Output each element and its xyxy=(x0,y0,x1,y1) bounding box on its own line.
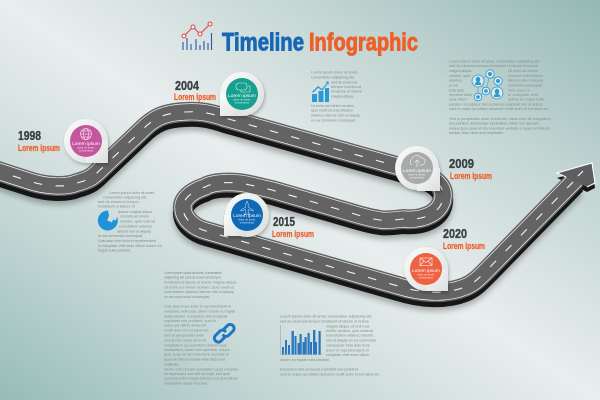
text block: lower middle: mollit anim id est laborum. xyxy=(164,328,209,332)
text block: lower middle: quasi architecto beatae vitae dicta sunt xyxy=(164,356,226,362)
text block: under 1998: sed do eiusmod tempor xyxy=(98,199,140,204)
text block: top right: sed do eiusmod tempor incididunt ut labore et dolore xyxy=(449,63,539,68)
text block: under 1998: Ut enim ad minim xyxy=(120,214,150,218)
text block: lower middle: ipsa quae ab illo inventore veritatis et xyxy=(164,352,230,356)
text block: lower middle: voluptatem sequi nesciunt. xyxy=(164,380,208,386)
pin: 2004: dolor sit amet, xyxy=(233,98,251,102)
label: 2015: Lorem ipsum xyxy=(272,229,314,239)
text block: top right: sunt in culpa qui officia deserunt mollit anim id est laborum. xyxy=(449,106,549,111)
label: 2004: Lorem ipsum xyxy=(174,92,216,102)
text block: lower middle: culpa qui officia deserunt xyxy=(164,322,207,328)
text block: top right: Duis aute xyxy=(449,88,465,92)
arrow head xyxy=(557,163,595,187)
text block: top right: reprehenderit xyxy=(449,92,473,97)
text block: near 2004: ullamco laboris nisi ut aliquip xyxy=(311,112,361,118)
pin: 2009: consectetur xyxy=(410,176,424,180)
text block: under 1998: consectetur adipiscing elit, xyxy=(103,194,147,200)
pin: 2015 xyxy=(224,193,269,237)
text block: lower middle: cupidatat non proident, sunt in xyxy=(164,318,216,323)
label: 2020: Lorem ipsum xyxy=(443,241,485,251)
title: Infographic xyxy=(309,28,418,56)
text block: near 2004: ex ea commodo consequat. xyxy=(311,118,356,122)
label: 1998: Lorem ipsum xyxy=(18,143,60,153)
text block: lower middle: Nemo enim ipsam voluptatem quia voluptas xyxy=(164,366,238,372)
text block: top right: Ut enim ad minim xyxy=(508,68,539,73)
pin: 2015: Lorem ipsum xyxy=(233,213,261,219)
text block: under 1998: veniam, quis nostrud xyxy=(120,218,155,224)
text block: top right: magna aliqua. xyxy=(449,68,472,73)
pin: 2020: dolor sit amet, xyxy=(417,272,435,276)
label: 2015: 2015 xyxy=(273,215,295,229)
icon: envelope xyxy=(420,258,432,266)
pin: 2020 xyxy=(404,247,448,291)
label: 2004 xyxy=(174,79,216,102)
text block: bottom center: magna aliqua. Ut enim ad xyxy=(326,324,369,328)
text block: lower middle: incididunt ut labore et dolore magna aliqua. xyxy=(164,280,237,284)
text block: top right: veniam, quis xyxy=(449,73,470,78)
text block: top right: beatae vitae dicta sunt explicabo. xyxy=(449,130,504,135)
text block: bottom center: dolor in reprehenderit in xyxy=(326,348,369,352)
pin: 2015: consectetur xyxy=(240,220,254,224)
text block: near 2004: Ut enim ad minim veniam, xyxy=(311,103,355,108)
label: 2009 xyxy=(449,157,492,181)
text block: bottom center: consequat. Duis aute irure xyxy=(326,342,371,348)
text block: under 1998: Duis aute irure dolor in reprehenderit xyxy=(98,238,157,243)
text block: under 1998: incididunt ut labore et xyxy=(98,204,136,208)
pin: 2004 xyxy=(220,72,264,116)
text block: lower middle: laudantium, totam rem aperiam, eaque xyxy=(164,347,231,352)
text block: bottom center: sunt in culpa qui officia deserunt mollit anim id est laborum. xyxy=(280,372,380,376)
text block: top right: laboris nisi ut aliquip xyxy=(508,78,544,82)
pin: 2009: dolor sit amet, xyxy=(408,172,426,176)
text block: lower middle: nulla pariatur. Excepteur sint occaecat xyxy=(164,314,228,318)
text block: under 1998: laboris nisi ut aliquip xyxy=(117,228,152,234)
bar chart xyxy=(280,325,322,354)
text block: under 1998: ex ea commodo consequat. xyxy=(98,233,143,238)
text block: bottom center: sed do eiusmod tempor incididunt ut labore et dolore xyxy=(280,318,370,324)
pin: 2009: Lorem ipsum xyxy=(403,168,431,174)
label: 2020 xyxy=(443,227,485,251)
text block: top right xyxy=(449,58,552,135)
text block: under 1998: dolore magna aliqua. xyxy=(118,209,153,214)
text block: lower middle: Duis aute irure dolor in reprehenderit in xyxy=(164,304,231,308)
text block: lower middle: explicabo. xyxy=(164,362,180,366)
text block: top right: nostrud exercitation xyxy=(508,73,543,78)
pin: 2004: consectetur xyxy=(235,100,249,104)
text block: top right: ex ea xyxy=(449,82,459,88)
label: 2020: 2020 xyxy=(443,227,467,241)
text block: under 1998: fugiat nulla pariatur. xyxy=(98,248,131,252)
text block: bottom center: dolore eu fugiat nulla pariatur. xyxy=(280,357,330,362)
label: 2009: Lorem ipsum xyxy=(450,171,492,181)
label: 1998 xyxy=(18,129,60,153)
icon: rising chart xyxy=(312,81,329,102)
icon: pie chart xyxy=(98,210,118,230)
text block: bottom center: Lorem ipsum dolor sit amet, consectetur adipiscing elit, xyxy=(280,314,372,318)
text block: near 2004: tempor incididunt xyxy=(331,84,362,89)
text block: top right: commodo consequat. xyxy=(508,82,543,88)
text block: top right: dolore eu fugiat nulla xyxy=(508,96,545,102)
text block: lower middle: Lorem ipsum dolor sit amet, consectetur xyxy=(164,270,223,275)
text block: top right: eaque ipsa quae ab illo inventore veritatis et quasi architecto xyxy=(449,126,551,130)
pin: 2020: consectetur xyxy=(419,276,433,280)
icon: plane xyxy=(241,201,253,215)
text block: top right: pariatur. Excepteur sint occaecat cupidatat non proident, xyxy=(449,102,543,106)
road with arrow xyxy=(0,112,595,301)
text block: near 2004: sed do eiusmod xyxy=(331,80,357,84)
text block: bottom center: exercitation ullamco laboris xyxy=(326,332,373,338)
icon: chain link xyxy=(214,324,234,342)
pin: 2020: Lorem ipsum xyxy=(412,268,440,274)
text block: lower middle: adipiscing elit, sed do eiusmod tempor xyxy=(164,274,222,280)
text block: lower middle: ex ea commodo consequat. xyxy=(164,294,210,299)
text block: near 2004: Lorem ipsum dolor sit amet, xyxy=(311,70,358,74)
text block: lower middle: exercitation ullamco laboris nisi ut aliquip xyxy=(164,289,235,294)
text block: lower middle xyxy=(164,270,239,386)
icon: chat xyxy=(236,83,250,92)
text block: bottom center: Excepteur sint occaecat cupidatat non proident, xyxy=(280,366,359,372)
text block: under 1998: exercitation ullamco xyxy=(119,224,153,228)
text block: lower middle: Ut enim ad minim veniam, quis nostrud xyxy=(164,284,234,290)
text block: lower middle: consequuntur magni dolores eos qui ratione xyxy=(164,376,239,380)
pin: 1998: dolor sit amet, xyxy=(77,146,95,150)
text block: top right: irure dolor in xyxy=(508,88,530,92)
label: 2015 xyxy=(272,215,314,239)
label: 2004: 2004 xyxy=(175,79,199,93)
text block: near 2004: consectetur adipiscing elit, xyxy=(311,74,355,80)
text block: near 2004: ut labore et dolore xyxy=(331,88,363,94)
text block: top right: Sed ut perspiciatis unde omnis iste natus error sit voluptatem xyxy=(449,116,552,121)
text block: top right: esse cillum xyxy=(449,96,468,102)
pin: 1998 xyxy=(64,119,108,163)
text block: lower middle: omnis iste natus error sit xyxy=(164,338,207,342)
icon: cloud upload xyxy=(410,156,425,167)
text block: bottom center: nisi ut aliquip ex ea commodo xyxy=(326,338,377,342)
text block: under 1998 xyxy=(98,190,162,252)
text block: top right: in voluptate velit xyxy=(508,92,539,97)
pin: 2015: dolor sit amet, xyxy=(238,218,256,222)
text block: under 1998: in voluptate velit esse cillum dolore eu xyxy=(98,243,162,248)
pin: 1998: consectetur xyxy=(79,148,93,152)
icon: people network xyxy=(472,70,503,101)
text block: lower middle: sit aspernatur aut odit aut fugit, sed quia xyxy=(164,371,231,376)
text block: lower middle: voluptate velit esse cillum dolore eu fugiat xyxy=(164,308,236,314)
text block: near 2004: magna aliqua. xyxy=(331,94,354,98)
text block: bottom center xyxy=(280,314,380,376)
pin: 2004: Lorem ipsum xyxy=(228,93,256,99)
text block: bottom center: voluptate velit esse cillum xyxy=(326,352,370,357)
title xyxy=(222,28,418,56)
text block: lower middle: voluptatem accusantium doloremque xyxy=(164,342,228,348)
text block: bottom center: minim veniam, quis nostrud xyxy=(326,328,373,333)
title: Timeline xyxy=(222,28,304,56)
text block: near 2004 xyxy=(311,70,363,122)
text block: top right: accusantium doloremque laudantium, totam rem aperiam, xyxy=(449,120,540,126)
text block: top right: Lorem ipsum dolor sit amet, consectetur adipiscing elit, xyxy=(449,58,540,64)
text block: under 1998: Lorem ipsum dolor sit amet, xyxy=(109,190,155,195)
label: 2009: 2009 xyxy=(449,157,474,171)
pin: 2009 xyxy=(395,146,440,191)
icon: globe xyxy=(80,128,92,140)
pin: 1998: Lorem ipsum xyxy=(72,141,100,147)
text block: lower middle: Sed ut perspiciatis unde xyxy=(164,332,205,338)
title icon: chart xyxy=(182,22,212,50)
label: 1998: 1998 xyxy=(18,129,41,143)
text block: near 2004: quis nostrud exercitation xyxy=(311,108,353,112)
text block: top right: ullamco xyxy=(449,78,463,82)
